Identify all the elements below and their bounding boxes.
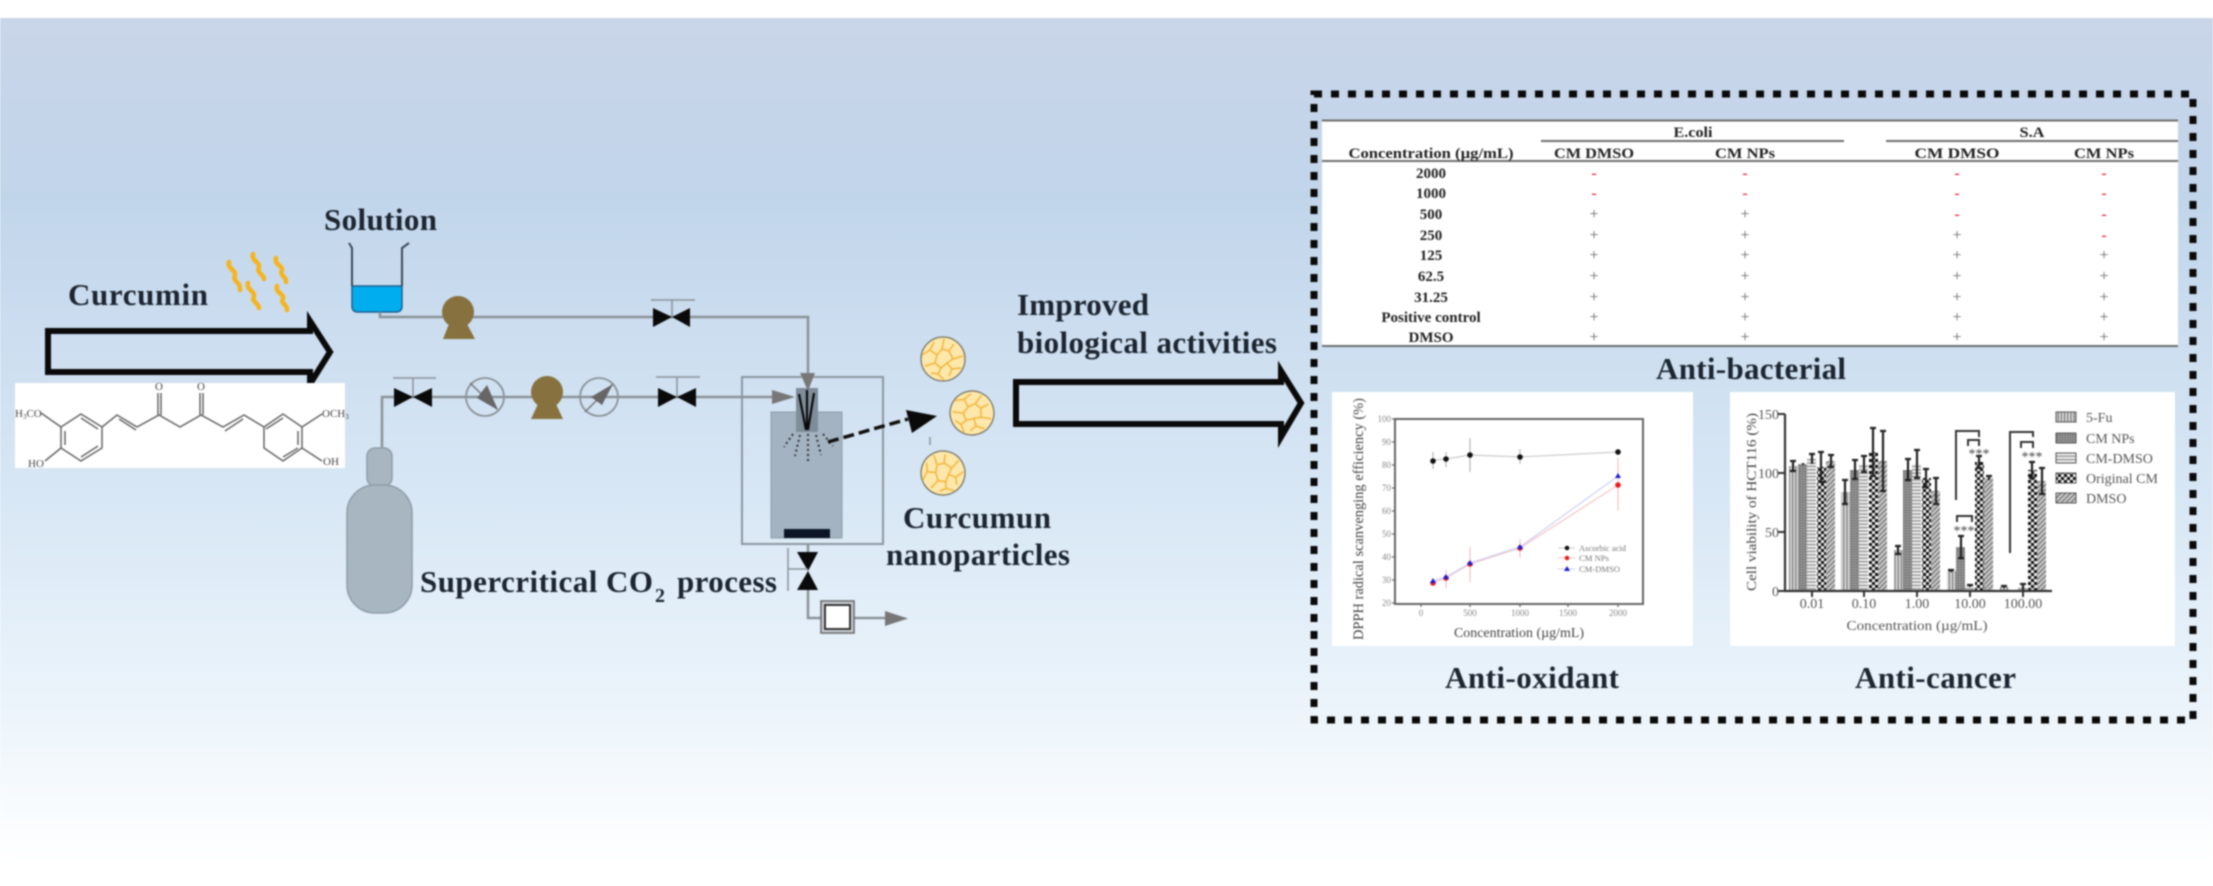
chart axes: 1500 bbox=[1559, 608, 1578, 618]
chart axes: 50 bbox=[1382, 529, 1392, 539]
chart axes: 20 bbox=[1382, 598, 1392, 608]
bars: CM NPs bbox=[1798, 464, 2018, 591]
heading: Anti-cancer: Anti-cancer bbox=[1855, 660, 2016, 695]
chart axes: 60 bbox=[1382, 506, 1392, 516]
curcumin molecular structure: HO bbox=[28, 458, 44, 470]
table results column: E.coli CM NPs: + bbox=[1740, 268, 1750, 285]
table results column: S.A CM DMSO: - bbox=[1954, 165, 1960, 182]
chart axes: 90 bbox=[1382, 437, 1392, 447]
chart axes: 1000 bbox=[1511, 608, 1530, 618]
icon: curcumin powder squiggles bbox=[229, 254, 287, 310]
curcumin molecular structure: 3 bbox=[23, 413, 27, 421]
table results column: E.coli CM NPs: + bbox=[1740, 289, 1750, 306]
table results column: S.A CM NPs: - bbox=[2101, 165, 2107, 182]
bar chart legend: Original CM bbox=[2086, 472, 2158, 487]
bars: CM-DMSO bbox=[1807, 459, 2027, 591]
arrow: nanoparticles to biological activities bbox=[1016, 371, 1301, 437]
table results column: S.A CM NPs: + bbox=[2099, 247, 2109, 264]
bar chart axes: 0.10 bbox=[1852, 597, 1876, 612]
chart axes: 40 bbox=[1382, 552, 1392, 562]
axis title: concentration: Concentration (µg/mL) bbox=[1846, 619, 1988, 634]
bar chart axes: 0 bbox=[1772, 585, 1779, 600]
table results column: S.A CM DMSO: + bbox=[1952, 227, 1962, 244]
significance brackets: *** bbox=[2022, 450, 2042, 465]
bar chart legend: 5-Fu bbox=[2086, 411, 2112, 426]
table results column: S.A CM DMSO: + bbox=[1952, 268, 1962, 285]
chart axes: 100 bbox=[1378, 414, 1392, 424]
icon: nanoparticle 1 bbox=[921, 337, 965, 381]
bars: DMSO bbox=[1826, 461, 2046, 591]
curcumin molecular structure: OH bbox=[323, 456, 339, 468]
chart axes: 80 bbox=[1382, 460, 1392, 470]
axis title: concentration: Concentration (µg/mL) bbox=[1454, 626, 1584, 641]
table row labels: DMSO bbox=[1408, 330, 1454, 346]
bar chart axes: 150 bbox=[1758, 408, 1779, 423]
label: Curcumun nanoparticles: nanoparticles bbox=[886, 537, 1070, 572]
curcumin molecular structure bbox=[15, 381, 349, 470]
table results column: E.coli CM DMSO: + bbox=[1589, 227, 1599, 244]
label: Supercritical CO2 process: Supercritical CO bbox=[420, 564, 653, 599]
curcumin molecular structure: CO bbox=[26, 408, 42, 420]
table results column: S.A CM DMSO: + bbox=[1952, 329, 1962, 346]
icon: solution pump bbox=[442, 296, 475, 339]
panel: anti-bacterial table bbox=[1322, 120, 2178, 346]
chart legend: Ascorbic acid bbox=[1579, 543, 1627, 553]
table results column: E.coli CM DMSO: + bbox=[1589, 289, 1599, 306]
icon: solution valve bbox=[651, 300, 695, 327]
curcumin molecular structure: O bbox=[155, 381, 163, 393]
table header: CM DMSO bbox=[1554, 146, 1634, 162]
bar chart axes: 0.01 bbox=[1800, 597, 1824, 612]
table header: S.A bbox=[2020, 125, 2045, 141]
table results column: E.coli CM DMSO: + bbox=[1589, 206, 1599, 223]
bar chart legend: CM NPs bbox=[2086, 432, 2135, 447]
bar chart axes bbox=[1758, 408, 2052, 612]
table results column: E.coli CM DMSO: + bbox=[1589, 329, 1599, 346]
table results column: E.coli CM DMSO: - bbox=[1591, 165, 1597, 182]
bar chart axes: 100.00 bbox=[2004, 597, 2042, 612]
bar chart legend: DMSO bbox=[2086, 492, 2126, 507]
curcumin molecular structure: OCH bbox=[322, 408, 345, 420]
heading: Solution: Solution bbox=[324, 202, 437, 237]
table results column: E.coli CM NPs: + bbox=[1740, 206, 1750, 223]
axis title: DPPH: DPPH radical scanvenging efficiency (%) bbox=[1351, 398, 1367, 640]
series: ascorbic acid bbox=[1430, 438, 1621, 472]
bar chart axes: 10.00 bbox=[1954, 597, 1986, 612]
table results column: S.A CM DMSO: + bbox=[1952, 309, 1962, 326]
chart axes: 2000 bbox=[1609, 608, 1628, 618]
chart axes: 30 bbox=[1382, 575, 1392, 585]
chart axes bbox=[1378, 414, 1643, 618]
icon: nanoparticle 3 bbox=[913, 443, 973, 503]
table row labels: 125 bbox=[1420, 248, 1442, 264]
table row labels: Positive control bbox=[1381, 310, 1481, 326]
curcumin molecular structure: O bbox=[197, 381, 205, 393]
chart legend: CM-DMSO bbox=[1579, 564, 1620, 574]
icon: outlet valve and separator bbox=[788, 544, 908, 633]
table row labels: 1000 bbox=[1416, 186, 1446, 202]
bars: 5-Fu bbox=[1789, 466, 2009, 591]
table row labels: 250 bbox=[1420, 228, 1442, 244]
panel: anti-oxidant chart bbox=[1332, 392, 1693, 646]
table results column: E.coli CM DMSO bbox=[1589, 165, 1599, 346]
table results column: E.coli CM NPs: - bbox=[1742, 165, 1748, 182]
bar chart legend bbox=[2056, 411, 2158, 507]
significance brackets: *** bbox=[1954, 524, 1974, 539]
table results column: E.coli CM NPs: - bbox=[1742, 185, 1748, 202]
error bars bbox=[1790, 428, 2045, 590]
table results column: S.A CM NPs: - bbox=[2101, 206, 2107, 223]
icon: pressure gauge 2 bbox=[580, 378, 618, 416]
series: CM NPs bbox=[1430, 458, 1621, 588]
arrow: curcumin to process bbox=[48, 321, 330, 384]
icon: solution beaker bbox=[349, 243, 409, 312]
chart axes: 0 bbox=[1419, 608, 1424, 618]
chart axes: 70 bbox=[1382, 483, 1392, 493]
table results column: S.A CM DMSO: + bbox=[1952, 289, 1962, 306]
chart legend: CM NPs bbox=[1579, 553, 1609, 563]
axis title: cell viability: Cell viability of HCT116 (%) bbox=[1745, 413, 1760, 591]
table results column: E.coli CM DMSO: + bbox=[1589, 247, 1599, 264]
icon: CO2 pump bbox=[531, 376, 563, 419]
icon: CO2 outlet valve bbox=[656, 377, 700, 407]
label: Improved biological activities bbox=[1017, 287, 1277, 360]
label: Supercritical CO2 process bbox=[420, 564, 777, 607]
icon: pressure gauge 1 bbox=[466, 378, 504, 416]
icon: nanoparticle 2 bbox=[943, 384, 1001, 442]
table results column: E.coli CM DMSO: + bbox=[1589, 268, 1599, 285]
label: Supercritical CO2 process: process bbox=[677, 564, 777, 599]
table results column: S.A CM NPs: + bbox=[2099, 268, 2109, 285]
table row labels: 2000 bbox=[1416, 166, 1446, 182]
curcumin molecular structure: 3 bbox=[345, 413, 349, 421]
table row labels: 62.5 bbox=[1418, 269, 1444, 285]
significance brackets: *** bbox=[1968, 447, 1990, 462]
chart legend bbox=[1558, 543, 1627, 574]
table header bbox=[1348, 125, 2134, 162]
bar chart axes: 1.00 bbox=[1905, 597, 1929, 612]
bar chart legend: CM-DMSO bbox=[2086, 452, 2153, 467]
table results column: S.A CM NPs: - bbox=[2101, 185, 2107, 202]
table row labels: 500 bbox=[1420, 207, 1442, 223]
solution feed line bbox=[380, 312, 808, 375]
label: Improved biological activities: Improved bbox=[1017, 287, 1149, 322]
curcumin molecular structure: H bbox=[15, 408, 23, 420]
table results column: E.coli CM NPs bbox=[1740, 165, 1750, 346]
table results column: E.coli CM DMSO: + bbox=[1589, 309, 1599, 326]
bar chart axes: 100 bbox=[1758, 467, 1779, 482]
dashed frame around results bbox=[1314, 94, 2193, 720]
heading: Curcumin: Curcumin bbox=[68, 277, 208, 312]
significance brackets bbox=[1954, 431, 2042, 553]
CO2 feed line bbox=[382, 397, 772, 448]
precipitation vessel bbox=[742, 373, 883, 544]
label: Curcumun nanoparticles: Curcumun bbox=[903, 500, 1051, 535]
chart axes: 500 bbox=[1463, 608, 1477, 618]
table header: CM DMSO bbox=[1914, 146, 2000, 162]
table row labels: 31.25 bbox=[1414, 290, 1448, 306]
dashed arrow to nanoparticles bbox=[828, 410, 937, 445]
table header: CM NPs bbox=[2074, 146, 2134, 162]
label: Curcumun nanoparticles bbox=[886, 500, 1070, 572]
table results column: S.A CM NPs bbox=[2099, 165, 2109, 346]
table results column: S.A CM NPs: - bbox=[2101, 227, 2107, 244]
table results column: E.coli CM NPs: + bbox=[1740, 329, 1750, 346]
table results column: S.A CM DMSO: - bbox=[1954, 206, 1960, 223]
label: Improved biological activities: biological activities bbox=[1017, 325, 1277, 360]
table results column: S.A CM DMSO bbox=[1952, 165, 1962, 346]
table results column: E.coli CM DMSO: - bbox=[1591, 185, 1597, 202]
table results column: S.A CM NPs: + bbox=[2099, 289, 2109, 306]
panel: anti-cancer chart bbox=[1730, 392, 2175, 646]
table results column: S.A CM NPs: + bbox=[2099, 309, 2109, 326]
heading: Anti-oxidant: Anti-oxidant bbox=[1445, 660, 1620, 695]
table results column: E.coli CM NPs: + bbox=[1740, 247, 1750, 264]
table results column: S.A CM DMSO: - bbox=[1954, 185, 1960, 202]
table results column: S.A CM NPs: + bbox=[2099, 329, 2109, 346]
table row labels bbox=[1381, 166, 1481, 346]
icon: CO2 inlet valve bbox=[393, 378, 436, 407]
bars: Original CM bbox=[1817, 452, 2037, 591]
table results column: S.A CM DMSO: + bbox=[1952, 247, 1962, 264]
heading: Anti-bacterial: Anti-bacterial bbox=[1656, 351, 1846, 386]
table header: E.coli bbox=[1674, 125, 1712, 141]
table results column: E.coli CM NPs: + bbox=[1740, 227, 1750, 244]
icon: CO2 cylinder bbox=[347, 448, 412, 613]
table header: Concentration (µg/mL) bbox=[1348, 146, 1514, 162]
label: Supercritical CO2 process: 2 bbox=[655, 585, 665, 607]
table header: CM NPs bbox=[1715, 146, 1775, 162]
bar chart axes: 50 bbox=[1765, 526, 1779, 541]
table results column: E.coli CM NPs: + bbox=[1740, 309, 1750, 326]
series: CM-DMSO bbox=[1430, 473, 1621, 583]
